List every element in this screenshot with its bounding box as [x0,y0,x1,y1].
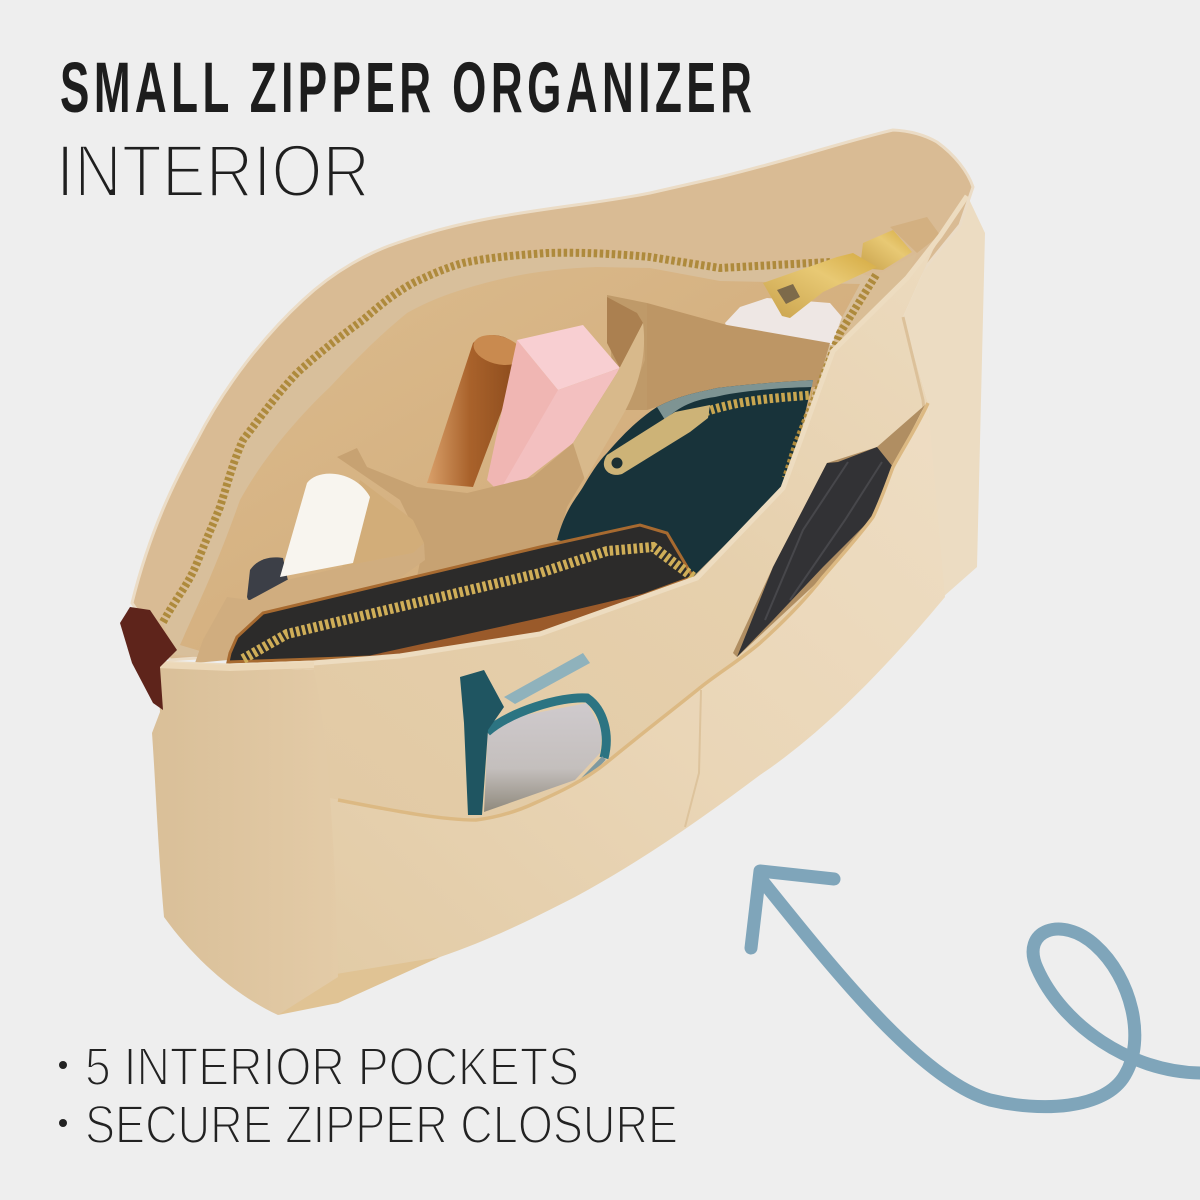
white bottle [280,474,370,577]
glasses [460,653,606,815]
rear right pocket [647,303,830,410]
pull hole [777,284,800,304]
zipper slider [860,230,912,270]
item one: 5 INTERIOR POCKETS [85,1037,579,1097]
zipper teeth right [786,275,876,478]
bottom band [278,957,440,1015]
left pocket [195,543,425,663]
navy pouch [557,380,813,577]
bullet list [59,1037,678,1155]
bullet one [59,1061,67,1069]
rear pocket fold [607,295,647,410]
wallet leather flap [363,585,688,657]
pull tab [763,253,877,318]
cable [737,447,893,657]
left panel rim [157,665,314,668]
cable highlights [765,462,882,620]
pouch zipper pull [604,405,710,475]
pull hole [612,458,622,468]
middle pocket right edge [573,323,644,480]
title: SMALL ZIPPER ORGANIZER [60,48,752,128]
cable coil [737,447,893,657]
middle pocket inner fold [607,297,643,368]
zipper tape end [890,217,940,253]
pull body [604,405,710,475]
zipper teeth left and top [163,253,830,622]
glasses lower rim [578,758,604,785]
item two: SECURE ZIPPER CLOSURE [85,1095,678,1155]
glasses rim [487,698,606,758]
zipper tape right [783,253,917,487]
illustration: canvas organizer bag [120,130,985,1015]
right side seam [903,317,943,597]
blue curly arrow [751,871,1200,1107]
lipstick cap [470,330,526,370]
pouch trim [657,380,813,420]
bag right side panel [903,195,985,597]
pocket seam [685,690,701,827]
front pocket [330,403,945,978]
pink box front face [500,368,620,490]
left pocket inner [340,480,424,580]
inner panel rim [157,196,967,666]
arrow curve [760,878,1200,1107]
front inner panel [157,195,967,830]
glasses frame side [460,670,504,815]
dark item behind left pocket [247,557,290,605]
pouch zipper [705,395,812,412]
glasses temple [504,653,590,704]
pink box [487,325,620,490]
glasses lens [484,703,602,812]
lipstick tube [427,335,522,487]
gold zipper pull [763,230,912,318]
left side panel [152,663,338,1015]
bag rim and back lining [132,130,973,660]
arrow head [751,871,834,948]
wallet [228,525,693,662]
subtitle: INTERIOR [56,130,370,212]
middle pocket [337,323,645,577]
interior lining [180,267,860,660]
wallet zipper [243,547,693,659]
pink box left face [487,340,558,490]
white bottle rear [725,298,842,345]
interior tape [163,253,873,660]
bullet two [59,1119,67,1127]
front pocket rim [338,403,928,820]
pocket opening [733,405,925,657]
leather tab [120,607,177,710]
pink box top face [517,325,620,390]
